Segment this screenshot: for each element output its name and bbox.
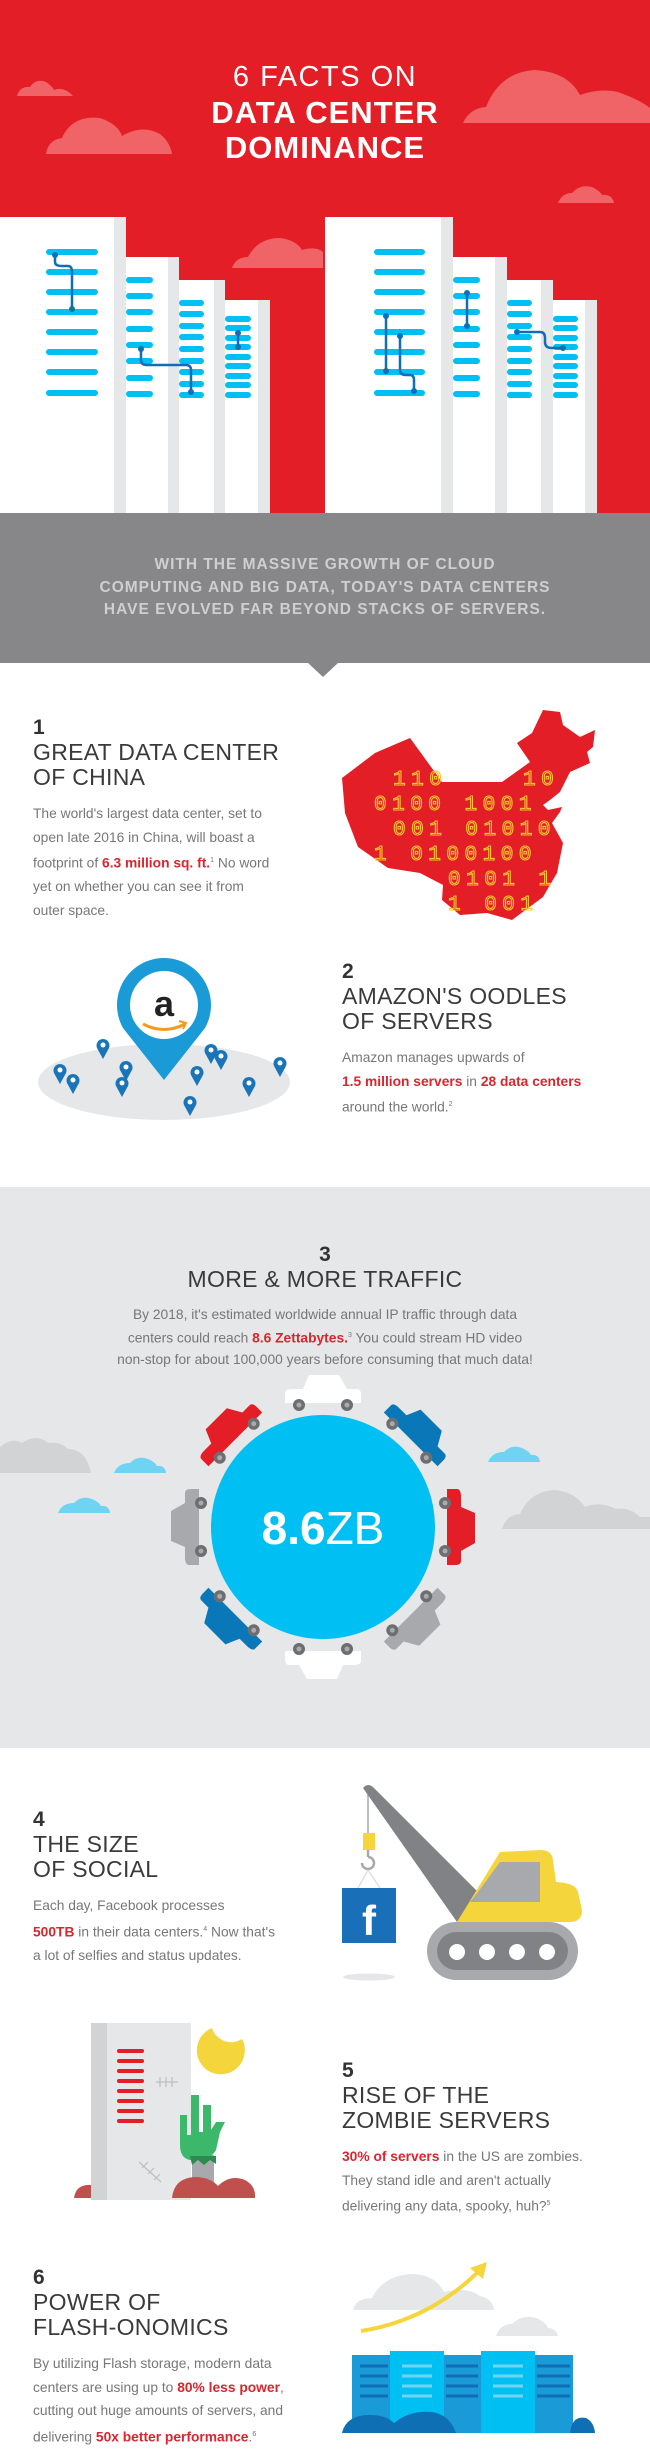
fact 4 text bbox=[33, 1808, 275, 1963]
fact 1 text: The world's largest data center, set to bbox=[33, 806, 262, 821]
intro text: COMPUTING AND BIG DATA, TODAY'S DATA CENTERS bbox=[100, 578, 550, 596]
fact 2 text: Amazon manages upwards of bbox=[342, 1050, 525, 1065]
fact 4 text: a lot of selfies and status updates. bbox=[33, 1948, 242, 1963]
fact 1 text: yet on whether you can see it from bbox=[33, 879, 244, 894]
amazon pin map bbox=[38, 958, 290, 1120]
fact 6 text: POWER OF bbox=[33, 2289, 161, 2315]
fact 5 text: RISE OF THE bbox=[342, 2082, 489, 2108]
amazon pin map: a bbox=[154, 983, 175, 1024]
cloud: title right big bbox=[463, 70, 650, 123]
china map with binary: 0100 1001 bbox=[374, 794, 537, 817]
fact 6 text: cutting out huge amounts of servers, and bbox=[33, 2403, 283, 2418]
fact 1 text bbox=[33, 716, 279, 918]
fact 6 text: 6 bbox=[33, 2266, 45, 2289]
intro text: WITH THE MASSIVE GROWTH OF CLOUD bbox=[154, 556, 496, 573]
fact 1 text: outer space. bbox=[33, 903, 109, 918]
fact 5 text bbox=[342, 2059, 583, 2214]
title: 6 FACTS ON bbox=[233, 61, 417, 93]
fact 2 text: AMAZON'S OODLES bbox=[342, 983, 567, 1009]
china map with binary: 1 0100100 bbox=[374, 844, 537, 867]
cloud: small right bbox=[558, 186, 614, 203]
crane with facebook box: f bbox=[362, 1897, 377, 1944]
header illustration: red sky with data center buildings bbox=[0, 0, 650, 677]
title bbox=[211, 61, 439, 165]
flash storage illustration with growth arrow bbox=[342, 2262, 595, 2433]
fact 3 text: MORE & MORE TRAFFIC bbox=[188, 1266, 462, 1292]
fact 2 text bbox=[342, 960, 581, 1115]
china map with binary: 0101 1 bbox=[448, 869, 557, 892]
building group left bbox=[0, 217, 270, 513]
fact 6 text: delivering 50x better performance.6 bbox=[33, 2429, 256, 2444]
fact 4 text: OF SOCIAL bbox=[33, 1856, 158, 1882]
fact 1 text: open late 2016 in China, will boast a bbox=[33, 830, 255, 844]
fact 6 text: By utilizing Flash storage, modern data bbox=[33, 2356, 272, 2371]
fact 2 text: around the world.2 bbox=[342, 1100, 453, 1115]
crane with facebook box bbox=[342, 1785, 582, 1980]
china map with binary: 1 001 bbox=[448, 894, 539, 917]
section 3 panel: traffic bbox=[0, 1187, 650, 1748]
fact 5 text: 5 bbox=[342, 2059, 354, 2082]
fact 1 text: 1 bbox=[33, 716, 45, 739]
title: DOMINANCE bbox=[225, 130, 425, 165]
fact 4 text: 500TB in their data centers.4 Now that's bbox=[33, 1924, 275, 1939]
cloud: title left big bbox=[46, 118, 172, 154]
fact 1 text: footprint of 6.3 million sq. ft.1 No word bbox=[33, 856, 269, 871]
intro text bbox=[100, 556, 550, 618]
fact 3 text: By 2018, it's estimated worldwide annual IP traffic through data bbox=[133, 1307, 517, 1322]
china map with binary bbox=[342, 710, 595, 920]
fact 2 text: 2 bbox=[342, 960, 354, 983]
fact 3 text bbox=[117, 1243, 533, 1367]
fact 1 text: GREAT DATA CENTER bbox=[33, 739, 279, 765]
china map with binary: 001 01010 bbox=[393, 819, 556, 842]
cloud: title left small bbox=[17, 81, 73, 96]
fact 5 text: delivering any data, spooky, huh?5 bbox=[342, 2199, 550, 2214]
fact 1 text: OF CHINA bbox=[33, 764, 145, 790]
intro gray band with pointer bbox=[0, 513, 650, 677]
fact 6 text: FLASH-ONOMICS bbox=[33, 2314, 229, 2340]
fact 4 text: Each day, Facebook processes bbox=[33, 1898, 224, 1913]
fact 5 text: ZOMBIE SERVERS bbox=[342, 2107, 550, 2133]
fact 5 text: 30% of servers in the US are zombies. bbox=[342, 2149, 583, 2164]
fact 4 text: 4 bbox=[33, 1808, 45, 1831]
cloud: middle bbox=[232, 238, 323, 268]
traffic circle with cars: 8.6ZB bbox=[262, 1502, 384, 1554]
intro text: HAVE EVOLVED FAR BEYOND STACKS OF SERVERS. bbox=[104, 601, 546, 618]
zombie server illustration bbox=[74, 2023, 256, 2200]
fact 5 text: They stand idle and aren't actually bbox=[342, 2172, 551, 2188]
fact 3 text: non-stop for about 100,000 years before consuming that much data! bbox=[117, 1352, 533, 1367]
fact 2 text: OF SERVERS bbox=[342, 1008, 493, 1034]
fact 4 text: THE SIZE bbox=[33, 1831, 139, 1857]
title: DATA CENTER bbox=[211, 95, 439, 130]
fact 6 text: centers are using up to 80% less power, bbox=[33, 2380, 284, 2394]
traffic circle with cars bbox=[0, 1375, 650, 1679]
building group right bbox=[325, 217, 597, 513]
fact 3 text: centers could reach 8.6 Zettabytes.3 You could stream HD video bbox=[128, 1331, 522, 1346]
fact 2 text: 1.5 million servers in 28 data centers bbox=[342, 1074, 581, 1088]
china map with binary: 10 bbox=[523, 769, 559, 792]
fact 3 text: 3 bbox=[319, 1243, 331, 1266]
fact 6 text bbox=[33, 2266, 284, 2444]
china map with binary: 110 bbox=[393, 769, 447, 792]
